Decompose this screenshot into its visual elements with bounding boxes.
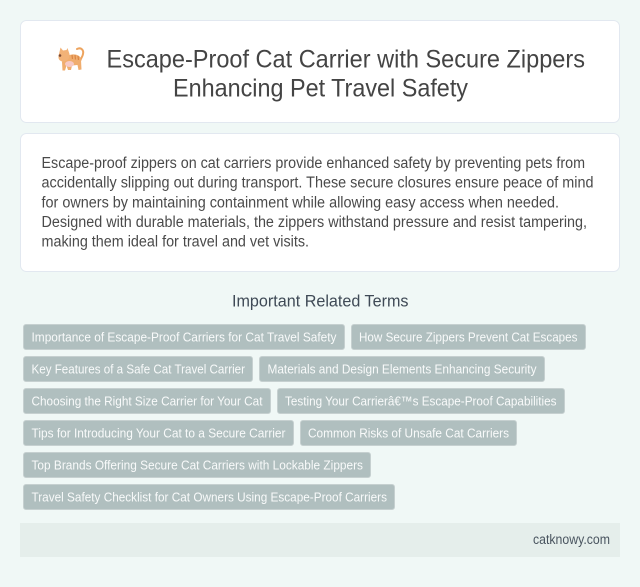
tag: Testing Your Carrierâ€™s Escape-Proof Capabilities (285, 394, 556, 408)
tag (24, 452, 370, 478)
panel: title card (20, 20, 620, 122)
tag (24, 356, 252, 382)
tag (24, 324, 344, 350)
tag (352, 324, 586, 350)
heading: related terms: Important Related Terms (232, 292, 408, 310)
description text: for owners by maintaining containment while allowing easy access when needed. (42, 194, 559, 211)
panel: description (20, 134, 620, 272)
tag: Travel Safety Checklist for Cat Owners Using Escape-Proof Carriers (32, 490, 387, 504)
description text: Designed with durable materials, the zippers withstand pressure and resist tampering, (42, 214, 587, 231)
tag (24, 484, 394, 510)
tag: Tips for Introducing Your Cat to a Secure Carrier (32, 426, 286, 440)
tag: Top Brands Offering Secure Cat Carriers with Lockable Zippers (32, 458, 363, 472)
title text (106, 45, 585, 102)
description text: Escape-proof zippers on cat carriers provide enhanced safety by preventing pets from (42, 155, 585, 172)
title text: Enhancing Pet Travel Safety (173, 74, 468, 102)
tag (260, 356, 544, 382)
footer site name: catknowy.com (533, 532, 610, 547)
tag: Key Features of a Safe Cat Travel Carrier (32, 362, 246, 376)
description text: making them ideal for travel and vet visits. (42, 234, 309, 250)
icon: cat (58, 48, 83, 70)
related terms tags (24, 324, 586, 510)
title text: Escape-Proof Cat Carrier with Secure Zippers (106, 45, 585, 73)
description text: accidentally slipping out during transport. These secure closures ensure peace of mind (42, 174, 594, 192)
description text (42, 155, 594, 250)
tag: Materials and Design Elements Enhancing Security (268, 362, 537, 376)
tag: Common Risks of Unsafe Cat Carriers (308, 426, 509, 440)
tag: Choosing the Right Size Carrier for Your Cat (32, 394, 263, 408)
tag: Importance of Escape-Proof Carriers for Cat Travel Safety (32, 330, 337, 344)
tag (24, 388, 270, 414)
tag: How Secure Zippers Prevent Cat Escapes (359, 330, 578, 344)
tag (278, 388, 564, 414)
footer (20, 523, 620, 557)
tag (300, 420, 516, 446)
tag (24, 420, 294, 446)
